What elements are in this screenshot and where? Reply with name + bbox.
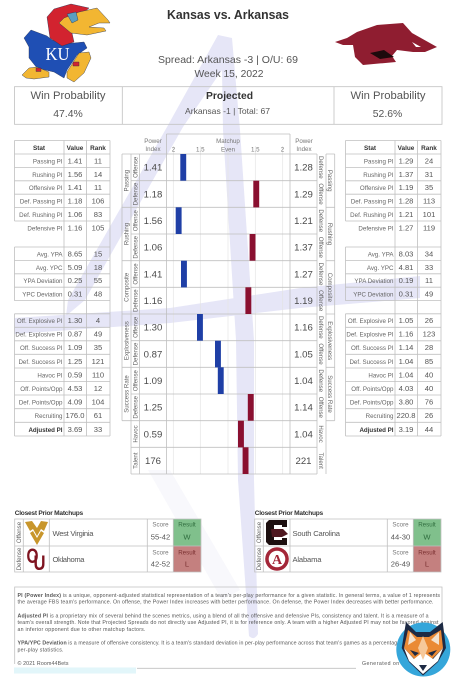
panel: Arkansas closest prior matchups: 26-49 (391, 560, 410, 568)
panel: Kansas stat table: YPA Deviation (23, 278, 63, 285)
panel: Kansas stat table: 0.59 (68, 370, 82, 379)
panel: Kansas stat table: 0.25 (68, 276, 82, 285)
panel: Kansas closest prior matchups: 55-42 (151, 532, 170, 542)
panel: Arkansas closest prior matchups: Score (392, 522, 409, 528)
week: Week 15, 2022 (194, 69, 264, 80)
matchup axis: Even (221, 146, 236, 154)
Arkansas win probability: 52.6% (373, 109, 402, 120)
panel: Kansas stat table: 4.09 (68, 398, 82, 406)
icon: Kansas Jayhawk logo: KU (46, 44, 70, 64)
right power index values (294, 163, 313, 467)
definition: adjusted PI (18, 613, 439, 633)
panel: Arkansas stat table: 1.29 (399, 156, 413, 165)
panel: Arkansas closest prior matchups: Offense (256, 521, 263, 543)
chart: matchup power index (122, 134, 335, 474)
panel: Kansas stat table: 35 (94, 343, 102, 352)
result cells (413, 519, 441, 572)
icon: West Virginia logo (25, 521, 48, 545)
panel: Arkansas stat table: 101 (423, 210, 435, 219)
panel: Kansas stat table: Avg. YPC (36, 265, 63, 272)
left category labels: Offense (132, 369, 140, 391)
matchup axis (172, 138, 285, 154)
panel: Kansas stat table: Defensive PI (27, 225, 63, 232)
panel: Arkansas stat table: 0.31 (399, 290, 413, 299)
left category labels: Defense (132, 342, 140, 365)
right category labels: Defense (317, 156, 324, 179)
left category labels: Explosiveness (124, 321, 130, 360)
panel: Kansas closest prior matchups: Score (152, 522, 169, 528)
left power index values: 1.25 (144, 403, 162, 414)
panel: Arkansas stat table: Rushing PI (363, 172, 394, 179)
projected result: Projected (206, 91, 253, 102)
panel: Arkansas stat table: 8.03 (399, 249, 413, 258)
icon: Alabama logo (265, 547, 289, 571)
panel: Kansas stat table: Def. Rushing PI (19, 212, 63, 219)
right category labels: Passing (326, 170, 333, 192)
icon: Oklahoma logo: O (26, 545, 38, 568)
panel: Kansas stat table: 0.31 (68, 290, 82, 299)
panel: Kansas closest prior matchups: Oklahoma (52, 555, 85, 564)
title: Kansas vs. Arkansas (167, 7, 289, 22)
panel: Kansas stat table: Avg. YPA (37, 251, 63, 258)
panel: Kansas stat table: 1.16 (68, 223, 82, 232)
background watermark (14, 35, 420, 638)
panel: Kansas closest prior matchups: West Virginia (52, 529, 94, 538)
panel: Kansas stat table: Rank (90, 145, 106, 152)
left power index values: 0.87 (144, 349, 162, 360)
panel: Kansas stat table: Def. Explosive PI (15, 332, 63, 339)
panel: Kansas stat table (14, 140, 110, 436)
panel: Kansas stat table: 1.18 (68, 197, 82, 206)
panel: Kansas stat table: 105 (92, 223, 104, 232)
panel: Kansas closest prior matchups: W (183, 532, 191, 542)
panel: Kansas closest prior matchups: 42-52 (151, 560, 170, 568)
right power index values: 1.16 (294, 323, 313, 334)
Kansas win probability (30, 90, 106, 120)
definition: YPA/YPC deviation (18, 640, 440, 653)
panel: Arkansas stat table: 1.05 (399, 316, 413, 325)
right power index values: 1.04 (294, 429, 313, 440)
definition: adjusted PI: Adjusted PI is a proprietary mix of several behind the scenes metrics, using a blend of all the offensive and defensive PIs, consistency and talent. It is a measure of a (18, 613, 429, 619)
left category labels: Success Rate (124, 375, 130, 413)
panel: Kansas stat table: Off. Explosive PI (17, 318, 63, 325)
left category labels: Offense (132, 263, 140, 285)
left category labels: Defense (132, 235, 140, 259)
generated date: Generated on 12/13/2022 (362, 661, 432, 667)
panel: Arkansas stat table: YPA Deviation (354, 278, 394, 285)
panel: Arkansas stat table: 11 (425, 276, 433, 285)
panel: Kansas stat table: 1.56 (68, 170, 82, 179)
panel: Arkansas stat table: 0.19 (399, 276, 413, 285)
panel: Arkansas stat table: 113 (423, 197, 435, 206)
panel: Kansas stat table: Havoc PI (37, 372, 63, 379)
panel: Arkansas stat table: Def. Success PI (349, 359, 394, 366)
panel: Arkansas stat table: 4.81 (399, 263, 413, 272)
matchup axis: 2 (281, 146, 285, 154)
panel: Arkansas closest prior matchups: Result (418, 550, 436, 556)
panel: Kansas stat table: 33 (94, 425, 102, 434)
panel: Arkansas stat table: 76 (425, 398, 433, 406)
left power index values (144, 163, 162, 467)
panel: Kansas stat table: 121 (92, 357, 104, 366)
Kansas matchup bars (176, 154, 224, 394)
left power index header (144, 138, 162, 153)
right category labels: Defense (317, 209, 324, 233)
panel: Kansas stat table: Recruiting (35, 413, 63, 420)
panel: Arkansas stat table (346, 140, 441, 436)
panel: Arkansas stat table: Passing PI (364, 158, 394, 165)
left power index values: 176 (145, 456, 161, 467)
panel: Kansas stat table: 48 (94, 290, 102, 299)
projected result (185, 91, 270, 116)
panel: Kansas stat table: 11 (94, 183, 102, 192)
panel: Kansas stat table: 4 (96, 316, 100, 325)
panel: Kansas closest prior matchups (15, 510, 201, 575)
icon: Arkansas razorback logo (335, 23, 437, 65)
panel: Arkansas stat table: Adjusted PI (359, 427, 394, 434)
panel: Kansas stat table: 1.41 (68, 156, 82, 165)
panel: Arkansas stat table: 3.19 (399, 425, 413, 434)
panel: Arkansas stat table: Def. Rushing PI (350, 212, 394, 219)
left category labels: Offense (132, 156, 140, 178)
panel: Kansas closest prior matchups: Score (152, 550, 169, 556)
panel: win probability and projection (14, 87, 442, 124)
left power index values: 1.09 (144, 376, 162, 387)
panel: Arkansas closest prior matchups: Closest Prior Matchups (255, 510, 324, 517)
panel: Kansas stat table: Off. Success PI (20, 345, 63, 352)
panel: Arkansas stat table: 119 (423, 223, 435, 232)
icon: Alabama logo: A (272, 553, 283, 568)
Arkansas win probability (350, 90, 426, 120)
panel: Arkansas stat table: Stat (364, 145, 377, 152)
panel: Kansas stat table: Value (67, 145, 84, 152)
panel: Arkansas closest prior matchups: L (425, 560, 429, 568)
right power index values: 1.14 (294, 403, 313, 414)
panel: Arkansas stat table: 35 (425, 183, 433, 192)
panel: Arkansas stat table: 1.28 (399, 197, 413, 206)
panel: Arkansas stat table: Def. Points/Opp (350, 400, 394, 406)
panel: Kansas stat table: Def. Passing PI (20, 199, 63, 206)
right category labels: Success Rate (326, 375, 333, 413)
panel: Arkansas stat table: 26 (425, 411, 433, 420)
panel: Arkansas closest prior matchups: 44-30 (391, 532, 410, 542)
panel: Kansas stat table: Passing PI (33, 158, 63, 165)
panel: Kansas closest prior matchups: Defense (16, 547, 23, 570)
panel: Arkansas stat table: Off. Success PI (351, 345, 394, 352)
definition: adjusted PI: an inferior opponent due to other matchup factors. (18, 627, 146, 633)
panel: Arkansas stat table: Off. Explosive PI (348, 318, 394, 325)
panel: Kansas stat table: Def. Points/Opp (19, 400, 63, 406)
Arkansas win probability: Win Probability (350, 90, 426, 102)
panel: Kansas stat table: Rushing PI (32, 172, 63, 179)
panel: Arkansas stat table: Def. Passing PI (351, 199, 394, 206)
definition: power index (18, 593, 440, 606)
icon: Oklahoma logo (26, 545, 46, 575)
faint cyan watermark strip (14, 668, 136, 674)
panel: Kansas stat table: 0.87 (68, 330, 82, 339)
panel: Kansas stat table: Adjusted PI (28, 427, 63, 434)
panel: Kansas stat table: 14 (94, 170, 102, 179)
panel: Arkansas stat table: Havoc PI (368, 372, 394, 379)
right category labels: Offense (317, 237, 324, 259)
left category labels: Rushing (124, 223, 130, 245)
definition: YPA/YPC deviation: YPA/YPC Deviation is a measure of offensive consistency. It is a team's standard deviation in per-play performance across that team's games as a percentage of their average (18, 640, 440, 646)
panel: Arkansas stat table: 40 (425, 370, 433, 379)
panel: Arkansas stat table: 31 (425, 170, 433, 179)
panel: Arkansas stat table: 220.8 (396, 411, 416, 420)
right power index values: 1.27 (294, 269, 313, 280)
icon: Oklahoma logo: U (34, 552, 46, 575)
projected result: Arkansas -1 | Total: 67 (185, 107, 270, 116)
left power index values: 1.41 (144, 269, 162, 280)
panel: Arkansas stat table: Recruiting (366, 413, 394, 420)
right power index values: 1.04 (294, 376, 313, 387)
panel: Arkansas stat table: Def. Explosive PI (346, 332, 394, 339)
right power index values: 1.28 (294, 163, 313, 174)
panel: Kansas closest prior matchups: Result (178, 550, 196, 556)
panel: Arkansas stat table: Off. Points/Opp (351, 386, 394, 393)
panel: Kansas stat table: 11 (94, 156, 102, 165)
right power index values: 1.05 (294, 349, 313, 360)
right category labels: Defense (317, 316, 324, 339)
panel: Arkansas stat table: 1.37 (399, 170, 413, 179)
panel: Kansas stat table: 3.69 (68, 425, 82, 434)
left category labels: Havoc (132, 425, 140, 443)
definition: YPA/YPC deviation: per-play statistics. (18, 647, 64, 653)
right category labels: Talent (317, 453, 324, 469)
left category labels: Defense (132, 289, 140, 312)
panel: Kansas closest prior matchups: L (185, 560, 189, 568)
right power index header (295, 138, 313, 153)
panel: Kansas stat table: 104 (92, 398, 104, 406)
copyright: © 2021 Room44Bets (18, 660, 69, 667)
left category labels (124, 156, 140, 469)
panel: Kansas closest prior matchups: Result (178, 522, 196, 528)
result cells (173, 519, 201, 572)
left power index values: 1.18 (144, 189, 162, 200)
right power index header: Index (296, 146, 312, 153)
panel: Arkansas stat table: 1.27 (399, 223, 413, 232)
panel: Kansas stat table: 12 (94, 384, 102, 393)
panel: Kansas stat table: 8.65 (68, 249, 82, 258)
left category labels: Defense (132, 182, 140, 205)
panel: Arkansas stat table: 34 (425, 249, 433, 258)
panel: Kansas closest prior matchups: Offense (16, 521, 23, 543)
left power index values: 1.30 (144, 323, 162, 334)
panel: Kansas stat table: 1.09 (68, 343, 82, 352)
left category labels: Talent (132, 452, 140, 469)
panel: Arkansas stat table: Avg. YPA (368, 251, 394, 258)
left power index values: 1.16 (144, 296, 162, 307)
left category labels: Composite (124, 272, 130, 302)
panel: Arkansas stat table: YPC Deviation (353, 292, 394, 299)
panel: Kansas stat table: YPC Deviation (22, 292, 63, 299)
panel: Kansas stat table: 176.0 (65, 411, 85, 420)
panel: Kansas stat table: 1.30 (68, 316, 82, 325)
left category labels: Defense (132, 395, 140, 419)
icon: Kansas Jayhawk logo (22, 4, 110, 82)
right category labels: Havoc (317, 425, 324, 443)
left category labels: Passing (124, 170, 130, 192)
icon: South Carolina logo (266, 520, 288, 545)
panel: Kansas stat table: Offensive PI (29, 185, 63, 192)
right category labels (317, 156, 333, 469)
panel: Kansas stat table: 15 (94, 249, 102, 258)
panel: Kansas stat table: 83 (94, 210, 102, 219)
panel: Arkansas closest prior matchups: Score (392, 550, 409, 556)
panel: Arkansas stat table: 28 (425, 343, 433, 352)
left power index header: Power (144, 138, 162, 145)
panel: Kansas stat table: 18 (94, 263, 102, 272)
panel: Kansas stat table: Def. Success PI (18, 359, 63, 366)
panel: Arkansas stat table: 33 (425, 263, 433, 272)
left power index values: 1.06 (144, 243, 162, 254)
Kansas win probability: Win Probability (30, 90, 106, 102)
right category labels: Explosiveness (326, 321, 333, 360)
left power index header: Index (145, 146, 161, 153)
right category labels: Defense (317, 369, 324, 393)
right category labels: Defense (317, 263, 324, 286)
matchup axis: Matchup (216, 138, 240, 145)
right category labels: Offense (317, 397, 324, 419)
icon: fox mascot (396, 622, 450, 676)
right category labels: Composite (326, 273, 333, 302)
panel: Arkansas stat table: 1.21 (399, 210, 413, 219)
panel: Arkansas stat table: 26 (425, 316, 433, 325)
panel: Arkansas stat table: Offensive PI (360, 185, 394, 192)
panel: Arkansas stat table: 44 (425, 425, 433, 434)
panel: Arkansas stat table: 40 (425, 384, 433, 393)
panel: Arkansas stat table: 1.14 (399, 343, 413, 352)
spread and over/under: Spread: Arkansas -3 | O/U: 69 (158, 55, 298, 66)
panel: Arkansas stat table: 4.03 (399, 384, 413, 393)
panel: Arkansas stat table: 3.80 (399, 398, 413, 406)
panel: Arkansas stat table: 1.04 (399, 357, 413, 366)
right category labels: Offense (317, 183, 324, 205)
panel: Arkansas stat table: Defensive PI (358, 225, 394, 232)
panel: Arkansas stat table: 1.19 (399, 183, 413, 192)
panel: Arkansas stat table: 1.04 (399, 370, 413, 379)
panel: Arkansas stat table: 24 (425, 156, 433, 165)
left category labels: Offense (132, 209, 140, 231)
panel: Arkansas closest prior matchups: South Carolina (292, 529, 341, 538)
panel: Kansas stat table: 106 (92, 197, 104, 206)
right power index values: 221 (295, 456, 312, 467)
right category labels: Rushing (326, 223, 333, 245)
panel: definitions footer (15, 587, 442, 668)
panel: Arkansas closest prior matchups: Alabama (292, 555, 322, 564)
left power index values: 0.59 (144, 429, 162, 440)
Arkansas matchup bars (238, 181, 259, 474)
left power index values: 1.56 (144, 216, 162, 227)
panel: Kansas stat table: 5.09 (68, 263, 82, 272)
panel: Kansas stat table: Off. Points/Opp (20, 386, 63, 393)
left category labels: Offense (132, 316, 140, 338)
panel: Arkansas closest prior matchups: Defense (256, 547, 263, 570)
matchup axis: 2 (172, 146, 176, 154)
panel: Arkansas stat table: Value (398, 145, 415, 152)
panel: Kansas stat table: 1.41 (68, 183, 82, 192)
right category labels: Offense (317, 343, 324, 365)
panel: Arkansas stat table: 123 (423, 330, 435, 339)
definition: power index: the average FBS team's performance. On offense, the Power Index increases with better performance. On defense, the Power Index decreases with better performance. (18, 600, 434, 606)
definition: power index: PI (Power Index) is a unique, opponent-adjusted statistical representation of a team's per-play performance for a given statistic. In general terms, a value of 1 represents (18, 593, 440, 599)
panel: Arkansas closest prior matchups: Result (418, 522, 436, 528)
right power index values: 1.37 (294, 243, 313, 254)
matchup axis: 1.5 (251, 146, 260, 154)
definition: adjusted PI: team's overall strength. Note that Projected Spreads do not directly use Adjusted PI, it is for reference only. A team with a higher Adjusted PI may not be favored against (18, 620, 439, 626)
panel: Arkansas closest prior matchups (255, 510, 441, 572)
panel: Kansas closest prior matchups: Closest Prior Matchups (15, 510, 84, 517)
panel: Arkansas stat table: 85 (425, 357, 433, 366)
panel: Arkansas stat table: 49 (425, 290, 433, 299)
panel: Arkansas closest prior matchups: W (423, 532, 431, 542)
panel: Kansas stat table: 4.53 (68, 384, 82, 393)
panel: Arkansas stat table: Rank (421, 145, 437, 152)
left power index values: 1.41 (144, 163, 162, 174)
panel: Kansas stat table: 49 (94, 330, 102, 339)
panel: Arkansas stat table: Avg. YPC (367, 265, 394, 272)
panel: Kansas stat table: 1.06 (68, 210, 82, 219)
right power index values: 1.19 (294, 296, 313, 307)
right power index values: 1.29 (294, 189, 313, 200)
panel: Kansas stat table: 110 (92, 370, 104, 379)
right power index header: Power (295, 138, 313, 145)
right power index values: 1.21 (294, 216, 313, 227)
panel: Kansas stat table: 1.25 (68, 357, 82, 366)
matchup axis: 1.5 (196, 146, 205, 154)
right category labels: Offense (317, 290, 324, 312)
panel: Kansas stat table: 61 (94, 411, 102, 420)
panel: Arkansas stat table: 1.16 (399, 330, 413, 339)
panel: Kansas stat table: 55 (94, 276, 102, 285)
Kansas win probability: 47.4% (53, 109, 83, 120)
panel: Kansas stat table: Stat (33, 145, 46, 152)
